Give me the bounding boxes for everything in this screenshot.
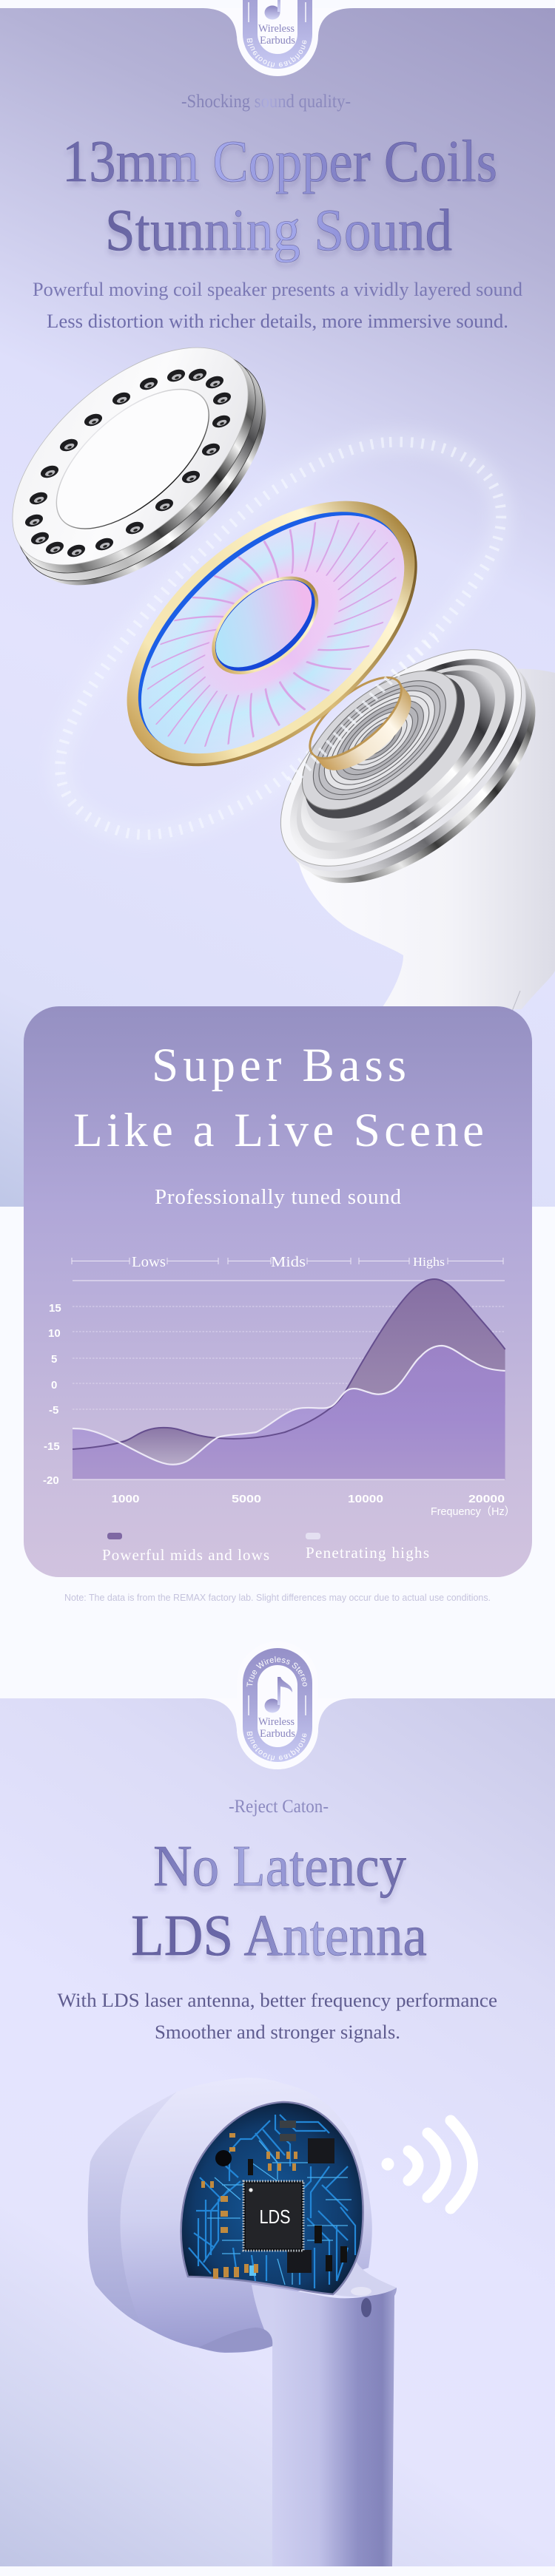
stem [252, 2285, 397, 2566]
badge: top: Bluetooth earphone [247, 38, 306, 68]
main chip LDS: LDS [259, 2206, 290, 2228]
y axis labels: 0 [51, 1379, 57, 1392]
icon: wireless signal [382, 2121, 472, 2209]
band brackets: Mids [271, 1254, 306, 1270]
badge: top: Wireless [258, 23, 295, 35]
description: speaker [33, 279, 522, 332]
small chips [215, 2121, 347, 2276]
title: 13mm Copper Coils Stunning Sound [62, 129, 497, 263]
heading: super bass [73, 1039, 484, 1157]
description: speaker: Powerful moving coil speaker presents a vividly layered sound [33, 279, 522, 300]
shoulder lip [333, 2261, 397, 2297]
band brackets: Lows [132, 1254, 166, 1270]
center hub [194, 557, 337, 694]
badge ring text top: True Wireless Stereo [246, 1656, 307, 1687]
x axis labels: 10000 [348, 1493, 383, 1505]
blue edge and pastel face [95, 466, 447, 799]
gold rim [80, 450, 465, 817]
badge center text: Earbuds [260, 1728, 295, 1740]
footnote: Note: The data is from the REMAX factory lab. Slight differences may occur due to actual use conditions. [64, 1593, 491, 1603]
badge: top [204, 0, 352, 76]
axis title: frequency: Frequency（Hz） [431, 1505, 515, 1518]
badge: true wireless stereo [205, 1648, 351, 1769]
chart: frequency response [43, 1279, 515, 1518]
y axis labels: 5 [51, 1353, 57, 1366]
sub heading: tuned sound: Professionally tuned sound [155, 1185, 401, 1209]
y axis labels: -5 [49, 1404, 58, 1417]
panel: super bass card [24, 1006, 532, 1577]
line: penetrating highs [73, 1346, 505, 1465]
area: mids and lows bump [118, 1428, 222, 1468]
line: mids and lows [73, 1279, 505, 1449]
area: penetrating highs [73, 1346, 505, 1479]
earbud cutaway [88, 2078, 397, 2566]
y axis labels: 15 [49, 1302, 61, 1315]
speaker driver: silver rings and coil [242, 608, 555, 924]
section background: sound quality [0, 8, 555, 1207]
earbud body white [296, 669, 555, 1017]
badge center text: Wireless [258, 1716, 295, 1728]
description: lds antenna [58, 1990, 497, 2043]
y axis labels: -15 [44, 1440, 60, 1453]
radial ribs [108, 478, 436, 789]
title: no latency lds antenna [131, 1834, 427, 1968]
sub heading: shocking sound quality: -Shocking sound quality- [181, 92, 351, 112]
x axis labels: 5000 [232, 1493, 261, 1505]
diaphragm disc [80, 450, 465, 817]
circuit board [181, 2102, 363, 2294]
y axis labels: -20 [43, 1474, 59, 1487]
gold voice coil [297, 664, 425, 784]
heading: super bass: Like a Live Scene [73, 1104, 484, 1157]
band brackets [72, 1254, 503, 1270]
title: no latency lds antenna: No Latency [153, 1834, 406, 1899]
x axis labels [111, 1493, 505, 1505]
x axis labels: 20000 [468, 1493, 505, 1505]
section background: latency [0, 1698, 555, 2566]
x axis labels: 1000 [111, 1493, 139, 1505]
main chip LDS [243, 2181, 303, 2251]
legend: penetrating highs [306, 1533, 429, 1562]
icon: music note [265, 1677, 292, 1712]
band brackets: Highs [413, 1255, 445, 1269]
legend: powerful mids and lows [102, 1533, 269, 1564]
perforated metal cap [0, 305, 306, 627]
title: 13mm Copper Coils Stunning Sound: Stunning Sound [105, 198, 452, 263]
y axis labels [43, 1302, 61, 1487]
gold capacitors [201, 2133, 297, 2279]
area: mids and lows peak [340, 1279, 505, 1405]
title: no latency lds antenna: LDS Antenna [131, 1904, 427, 1968]
y axis labels: 10 [48, 1327, 61, 1340]
description: speaker: Less distortion with richer details, more immersive sound. [47, 311, 508, 332]
badge: top: Earbuds [260, 35, 295, 47]
heading: super bass: Super Bass [152, 1039, 406, 1092]
badge center text [258, 1716, 295, 1740]
description: lds antenna: Smoother and stronger signals. [155, 2021, 400, 2043]
legend: penetrating highs: Penetrating highs [306, 1544, 429, 1562]
legend: powerful mids and lows: Powerful mids and lows [102, 1546, 269, 1564]
sub heading: reject caton: -Reject Caton- [229, 1797, 329, 1817]
title: 13mm Copper Coils Stunning Sound: 13mm Copper Coils [62, 129, 497, 194]
description: lds antenna: With LDS laser antenna, better frequency performance [58, 1990, 497, 2011]
earbud head [88, 2078, 372, 2353]
badge ring text bottom: Bluetooth earphone [247, 1732, 306, 1761]
wave segment over the driver [290, 637, 437, 782]
sound wave ring [60, 442, 501, 835]
